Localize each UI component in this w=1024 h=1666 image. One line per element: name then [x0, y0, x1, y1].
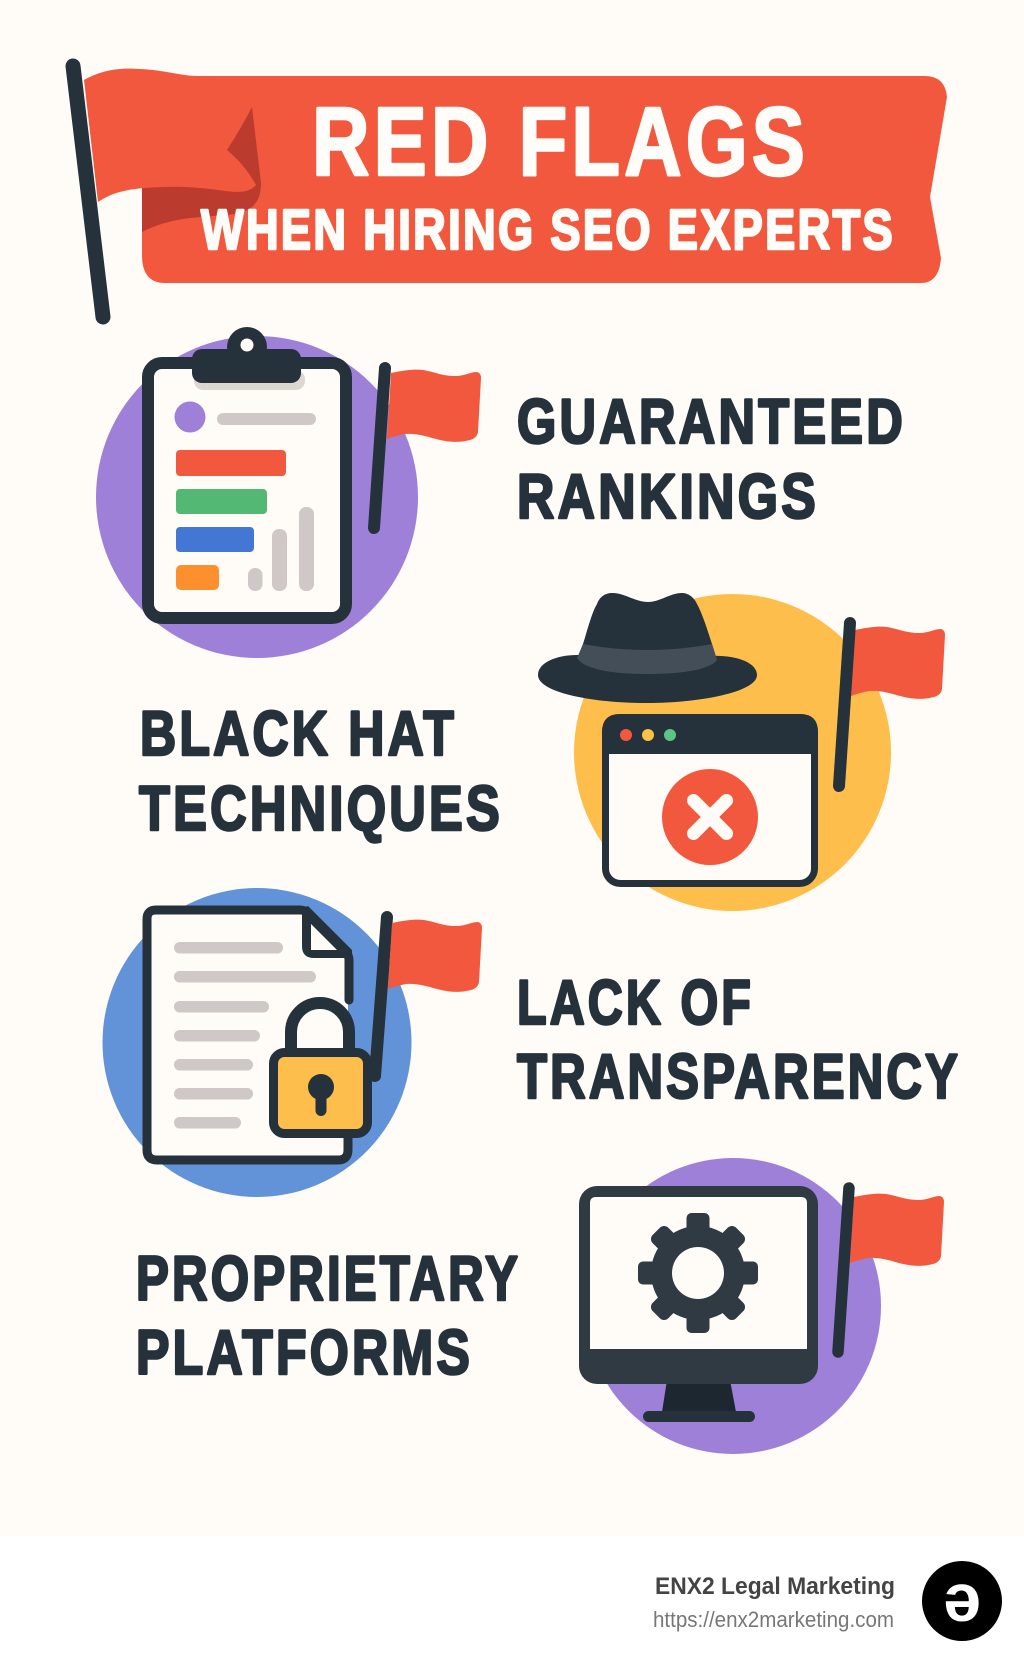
purple circle	[96, 336, 418, 658]
flag pole	[375, 917, 387, 1076]
text lines	[174, 942, 316, 1128]
red bar	[176, 450, 286, 476]
document fold	[302, 906, 352, 958]
label: proprietary platforms: PLATFORMS	[136, 1318, 473, 1388]
monitor base	[643, 1411, 755, 1422]
logo glyph: ə	[943, 1560, 981, 1636]
red flag	[388, 920, 482, 992]
hat crown	[577, 593, 717, 660]
label: guaranteed rankings	[517, 387, 906, 532]
flag pole	[839, 623, 850, 786]
keyhole	[308, 1074, 334, 1116]
flag pole	[73, 66, 103, 317]
flag pole	[374, 368, 385, 528]
logo circle	[922, 1561, 1002, 1641]
label: lack of transparency: LACK OF	[517, 968, 754, 1038]
label: guaranteed rankings: RANKINGS	[517, 462, 819, 532]
padlock body	[274, 1052, 368, 1134]
header line	[217, 413, 316, 425]
panel: black hat techniques icon	[538, 593, 945, 911]
title banner	[73, 66, 947, 317]
yellow circle	[574, 594, 891, 911]
browser window	[606, 718, 814, 884]
mini bar chart	[248, 507, 314, 591]
clip shadow	[194, 370, 305, 390]
monitor screen	[590, 1197, 807, 1349]
document page	[147, 910, 348, 1160]
orange bar	[176, 565, 219, 590]
hat band	[577, 644, 717, 674]
fold highlight	[311, 924, 337, 950]
label: black hat techniques	[139, 699, 503, 844]
clipboard board	[148, 363, 346, 618]
company url: https://enx2marketing.com	[653, 1607, 894, 1632]
window dots	[620, 729, 676, 741]
company name: ENX2 Legal Marketing	[655, 1573, 895, 1600]
label: black hat techniques: TECHNIQUES	[139, 774, 503, 844]
red flag	[850, 1194, 944, 1266]
clip	[192, 327, 301, 383]
label: guaranteed rankings: GUARANTEED	[517, 387, 906, 457]
purple circle	[585, 1158, 881, 1454]
panel: lack of transparency icon	[102, 888, 482, 1197]
error circle	[662, 769, 758, 865]
document outline	[147, 910, 349, 1160]
gear icon	[638, 1213, 758, 1333]
blue bar	[176, 527, 254, 552]
panel: guaranteed rankings icon	[96, 327, 481, 658]
label: black hat techniques: BLACK HAT	[140, 699, 457, 769]
heading: red flags: RED FLAGS	[312, 87, 809, 196]
padlock shackle	[291, 1003, 349, 1052]
error cross	[694, 800, 726, 834]
label: proprietary platforms	[136, 1244, 521, 1388]
flag pole	[838, 1188, 849, 1352]
avatar dot	[174, 402, 206, 432]
clip hole	[240, 338, 254, 352]
hat brim	[538, 655, 757, 703]
footer	[653, 1560, 1002, 1641]
label: proprietary platforms: PROPRIETARY	[136, 1244, 521, 1314]
red flag	[851, 627, 945, 699]
browser title bar	[602, 714, 818, 754]
green bar	[176, 489, 267, 514]
panel: proprietary platforms icon	[579, 1158, 944, 1454]
waving flag front	[84, 69, 256, 202]
monitor stand	[662, 1380, 736, 1412]
red flag	[387, 370, 481, 442]
monitor body	[579, 1186, 818, 1384]
banner ribbon	[142, 76, 947, 283]
banner fold shadow	[142, 107, 261, 232]
blue circle	[102, 888, 412, 1197]
label: lack of transparency	[517, 968, 961, 1112]
